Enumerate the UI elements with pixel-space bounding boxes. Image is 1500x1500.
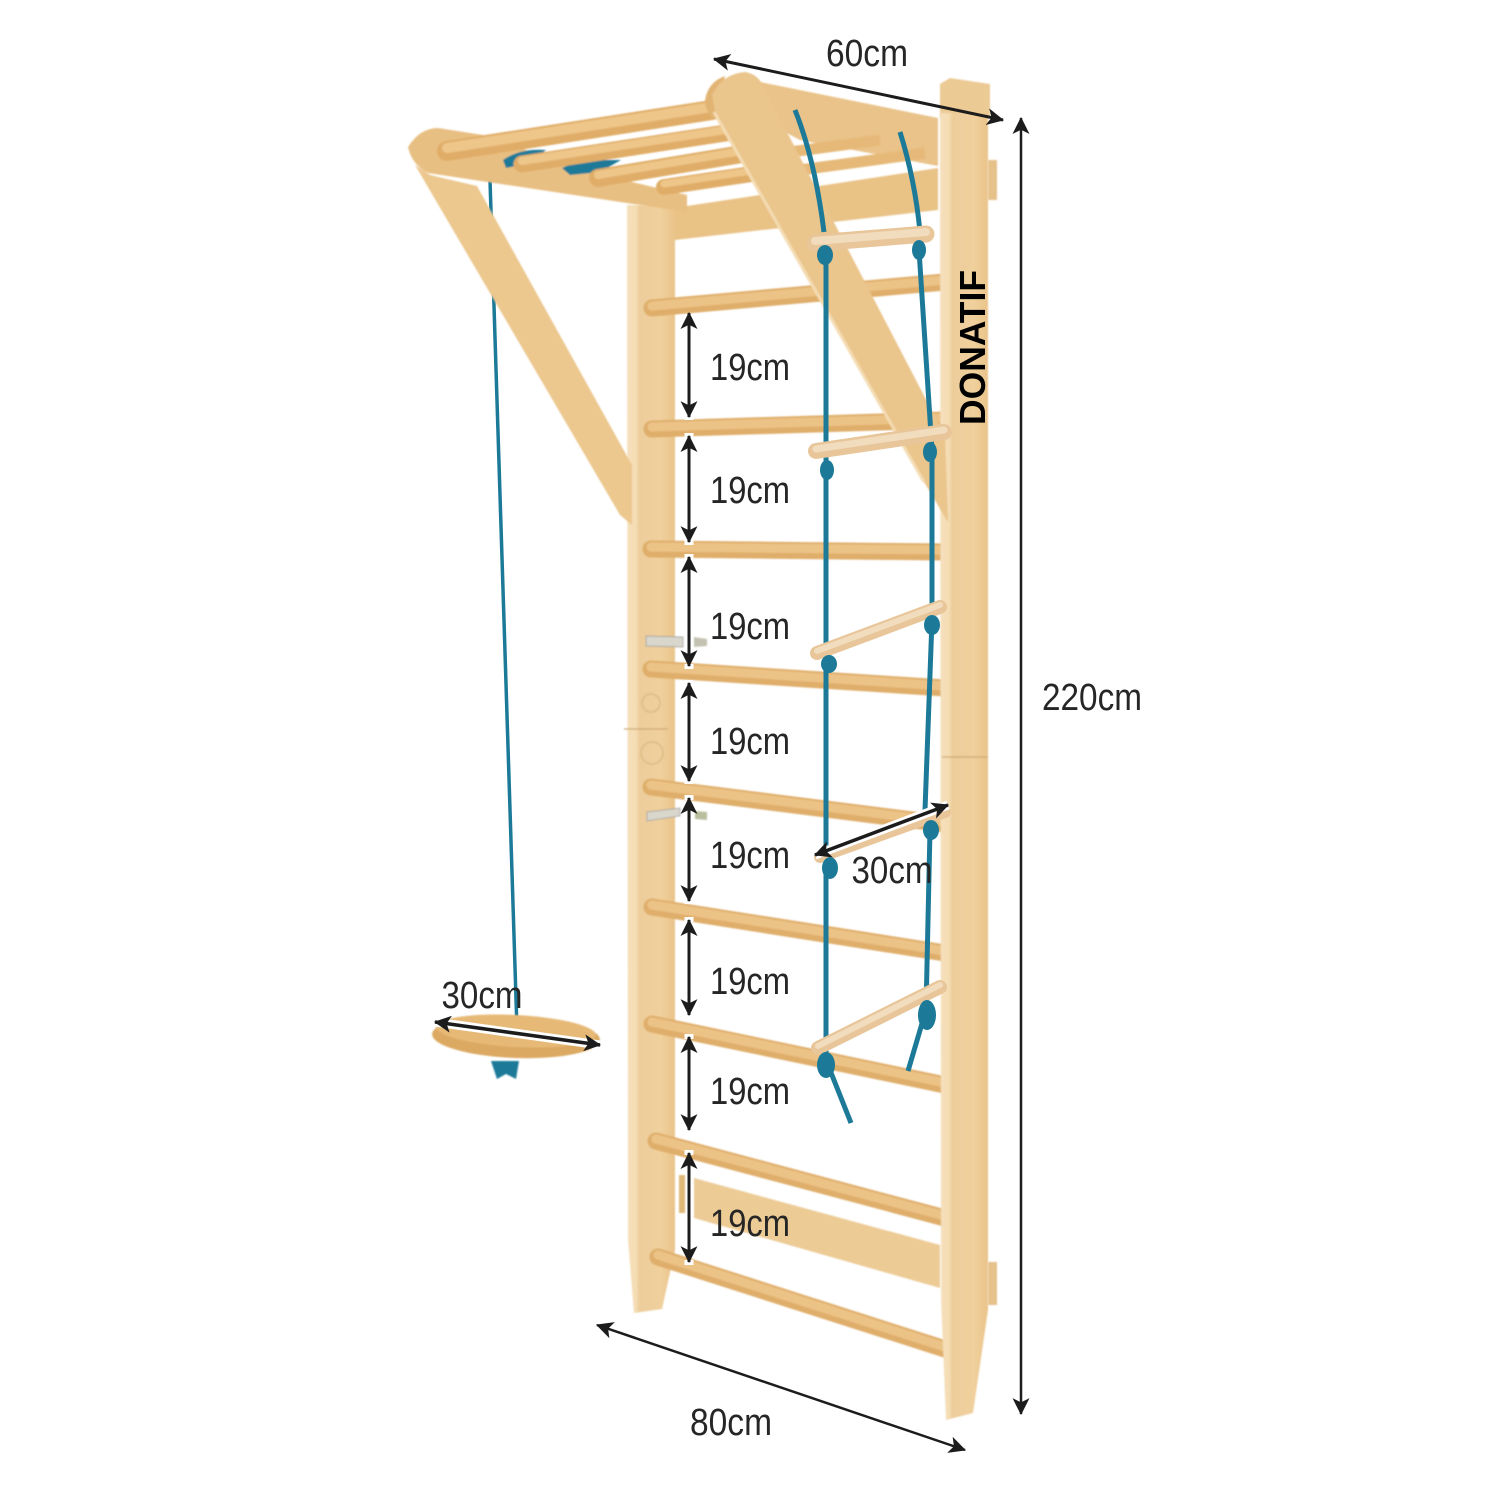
monkey rung 4: [664, 169, 765, 187]
brand label: DONATIF: [952, 270, 993, 425]
19cm label 6: 19cm: [710, 961, 790, 1003]
ladder rung 4: [820, 812, 945, 857]
80cm label: 80cm: [690, 1402, 772, 1444]
19cm label 3: 19cm: [710, 606, 790, 648]
rung 8: [656, 1139, 945, 1218]
19cm label 4: 19cm: [710, 721, 790, 763]
dimension arrows: [435, 59, 1021, 1450]
rope knots: [817, 240, 940, 1078]
rung 3: [651, 547, 945, 552]
monkey rung 3: [598, 150, 748, 178]
seat disc: [431, 1013, 601, 1061]
right post side blocks: [988, 160, 997, 1305]
white arrow halos: [435, 415, 948, 1265]
monkey rung 2: [522, 129, 732, 164]
swing rope: [490, 180, 517, 1030]
ladder 30cm arrow: [815, 805, 948, 855]
right bracket end cap: [705, 76, 725, 120]
rung 6: [652, 905, 945, 953]
metal brackets: [646, 636, 707, 821]
swing seat: [431, 1011, 601, 1079]
19cm label 1: 19cm: [710, 347, 790, 389]
top rungs: [447, 107, 765, 187]
ladder rungs: [815, 232, 945, 1048]
monkey rung 1: [447, 107, 712, 151]
seat top: [435, 1011, 597, 1051]
climbing ladder: [795, 110, 945, 1123]
right diagonal bracket: [712, 72, 948, 522]
board block: [679, 1175, 685, 1213]
ladder ropes: [795, 110, 932, 1123]
220cm arrow: [1020, 118, 1022, 1414]
60cm arrow: [714, 59, 1003, 120]
right post: [940, 113, 988, 1420]
80cm arrow: [597, 1325, 965, 1450]
19cm arrows: [688, 313, 690, 1262]
left post: [627, 205, 675, 1313]
ladder 30cm label: 30cm: [852, 850, 932, 892]
monkey bars: [408, 72, 948, 525]
rear top rail: [760, 82, 938, 166]
rung 7: [652, 1022, 945, 1085]
ladder rung 2: [816, 430, 944, 451]
rung 9: [658, 1255, 945, 1349]
rung 1: [652, 280, 945, 308]
second top rail: [675, 168, 938, 240]
19cm label 8: 19cm: [710, 1203, 790, 1245]
rung 5: [651, 785, 945, 824]
left diagonal brace: [415, 165, 632, 525]
60cm label: 60cm: [826, 33, 908, 75]
post knots: [641, 694, 663, 764]
rung 2: [652, 418, 945, 429]
ladder rung 1: [815, 232, 926, 243]
bracket edge highlight: [714, 112, 924, 482]
ladder rung 3: [817, 605, 940, 653]
monkey bar knots: [503, 150, 621, 175]
19cm label 7: 19cm: [710, 1071, 790, 1113]
lower back board: [694, 1178, 940, 1288]
wall bars frame: [624, 78, 997, 1313]
top cap of rear post: [940, 78, 990, 118]
19cm label 2: 19cm: [710, 470, 790, 512]
rung 4: [651, 667, 945, 688]
far monkey rungs behind bracket: [790, 140, 925, 170]
ladder rung 5: [818, 985, 940, 1048]
left side rail: [408, 128, 687, 212]
dimension labels: [442, 33, 1142, 1444]
19cm label 5: 19cm: [710, 835, 790, 877]
swing 30cm arrow: [435, 1022, 600, 1045]
220cm label: 220cm: [1042, 677, 1142, 719]
seat knot: [491, 1061, 519, 1079]
wall rungs: [651, 280, 945, 1349]
swing 30cm label: 30cm: [442, 975, 522, 1017]
post joint line: [624, 728, 668, 730]
